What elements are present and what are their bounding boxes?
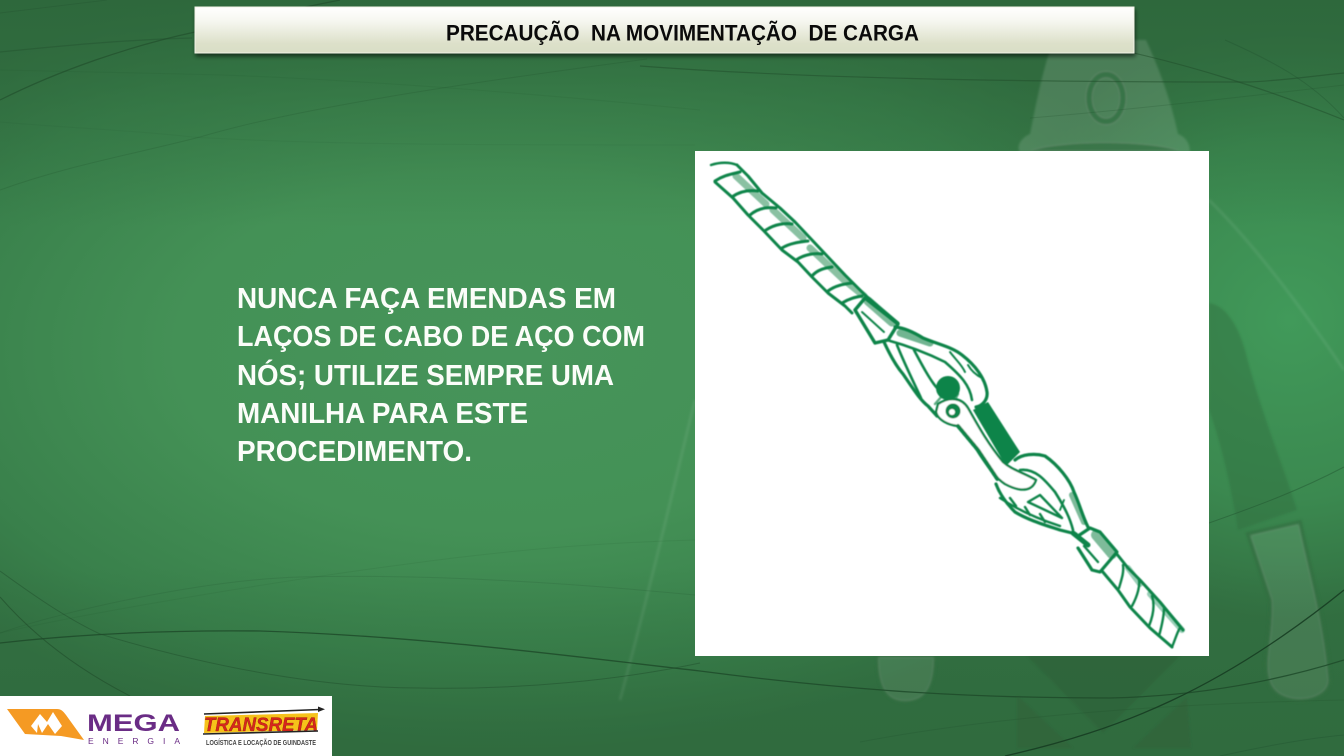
wordmark: TRANSRETA	[204, 715, 318, 736]
shackle body	[936, 399, 1036, 490]
shackle bar	[973, 402, 1020, 466]
instruction text: NUNCA FAÇA EMENDAS EM	[237, 283, 616, 315]
rope drawing	[711, 163, 1183, 647]
title bar	[195, 7, 1134, 53]
loop two	[996, 454, 1088, 534]
body outline	[620, 200, 1344, 700]
upper rope	[711, 163, 898, 343]
instruction text	[237, 283, 645, 468]
loop one	[884, 327, 987, 416]
arrow line	[204, 710, 320, 714]
instruction text: LAÇOS DE CABO DE AÇO COM	[237, 321, 645, 353]
logo: Mega Energia: ENERGIA	[88, 736, 180, 746]
helmet	[1018, 40, 1190, 152]
wordmark: MEGA	[87, 710, 180, 737]
title text: PRECAUÇÃO NA MOVIMENTAÇÃO DE CARGA	[446, 20, 919, 46]
right arm	[1209, 303, 1297, 530]
logos panel	[0, 696, 332, 756]
clamp	[855, 298, 898, 343]
icon: orange chevron	[7, 709, 84, 740]
instruction text: MANILHA PARA ESTE	[237, 398, 528, 430]
harness V	[1027, 656, 1180, 733]
logo: Mega Energia	[7, 709, 180, 746]
logo: Transreta: LOGÍSTICA E LOCAÇÃO DE GUINDASTE	[206, 738, 316, 747]
dome of shackle pin	[936, 376, 960, 400]
logo: Transreta	[203, 706, 325, 747]
lower rope	[1102, 553, 1183, 647]
illustration panel: wire rope joined by shackle	[695, 151, 1209, 656]
lower clamp	[1073, 528, 1117, 572]
instruction text: PROCEDIMENTO.	[237, 436, 472, 468]
worker silhouette watermark	[620, 40, 1344, 748]
yellow band	[204, 713, 318, 733]
left glove	[877, 656, 935, 702]
instruction text: NÓS; UTILIZE SEMPRE UMA	[237, 360, 614, 392]
